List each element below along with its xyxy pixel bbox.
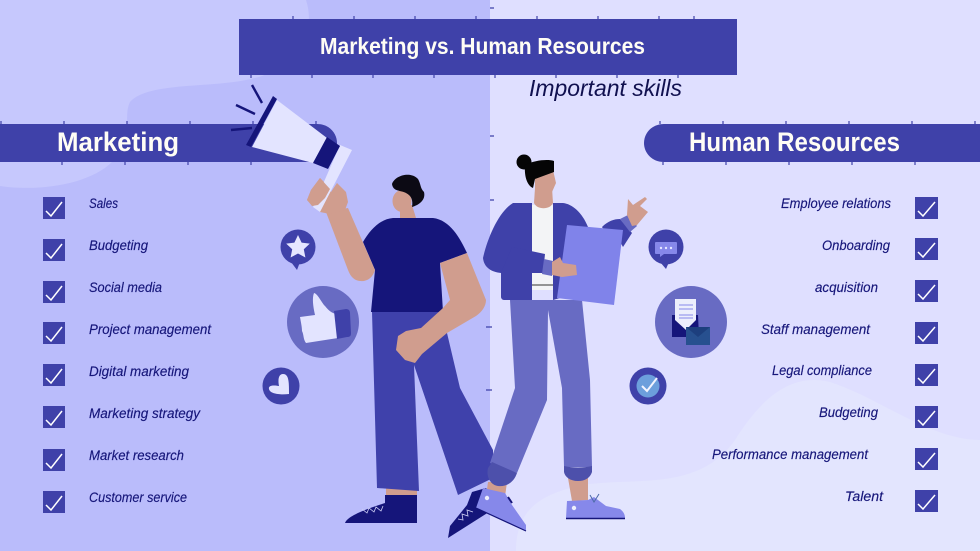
- human resources heading bar: [644, 121, 980, 165]
- skill: Sales: [43, 196, 118, 219]
- man's neck: [400, 205, 416, 218]
- skill: Budgeting: Budgeting: [89, 238, 148, 253]
- woman figure with folder: [476, 154, 648, 531]
- skill: Legal compliance: [772, 363, 938, 386]
- skill: Marketing strategy: [43, 406, 201, 428]
- subtitle: Important skills: [529, 75, 682, 101]
- human resources heading bar: Human Resources: [689, 127, 900, 157]
- human resources skills list: [712, 196, 938, 512]
- title banner: [239, 16, 737, 78]
- marketing skills list: [43, 196, 212, 513]
- icon: check mark: [630, 368, 666, 404]
- marketing heading bar: [0, 121, 337, 165]
- skill: Onboarding: Onboarding: [822, 238, 890, 253]
- megaphone rim: [246, 96, 277, 147]
- icon: heart: [262, 368, 300, 404]
- megaphone body: [252, 100, 327, 163]
- skill: acquisition: [815, 280, 938, 302]
- skill: Onboarding: [822, 238, 938, 260]
- woman's trouser cuffs: [487, 462, 592, 486]
- sound lines: [231, 85, 262, 130]
- title banner: Marketing vs. Human Resources: [320, 33, 645, 59]
- skill: Project management: [43, 322, 212, 344]
- icon: envelope with letter: [655, 286, 727, 358]
- megaphone handle: [313, 145, 352, 212]
- skill: Employee relations: Employee relations: [781, 196, 891, 211]
- man's trousers: [372, 312, 493, 495]
- man's shirt: [363, 218, 467, 312]
- skill: Digital marketing: [43, 364, 189, 386]
- skill: Market research: [43, 448, 184, 471]
- man's back shoe: [448, 488, 500, 538]
- man's fingers: [307, 178, 330, 206]
- woman's trousers: [490, 300, 592, 473]
- woman's cuff: [542, 259, 553, 276]
- skill: Social media: Social media: [89, 280, 162, 295]
- man figure with megaphone: [231, 85, 500, 538]
- skill: acquisition: acquisition: [815, 280, 878, 295]
- woman's far cuff: [620, 215, 637, 232]
- skill: Customer service: [43, 490, 187, 513]
- man's head: [392, 190, 412, 212]
- skill: Staff management: Staff management: [761, 322, 871, 337]
- man's hair: [392, 175, 424, 207]
- skill: Talent: Talent: [845, 489, 884, 504]
- icon: star bubble: [280, 230, 316, 270]
- woman's neck: [534, 188, 553, 208]
- woman's folder: [557, 225, 623, 305]
- man's raised arm: [326, 208, 375, 281]
- man's front shoe: [345, 495, 417, 523]
- skill: Performance management: [712, 447, 938, 470]
- icon: speech bubble: [648, 230, 684, 269]
- woman's right ankle: [568, 478, 588, 501]
- woman's far arm: [602, 219, 632, 247]
- skill: Budgeting: [819, 405, 938, 428]
- icon: thumbs up: [287, 286, 359, 358]
- marketing heading bar: Marketing: [57, 127, 179, 157]
- man's hand: [307, 178, 348, 214]
- man's ankle: [386, 488, 417, 496]
- woman's pointing hand: [627, 197, 648, 226]
- woman's jacket sleeve: [501, 247, 545, 273]
- skill: Sales: Sales: [89, 196, 118, 211]
- woman's jacket: [483, 203, 588, 300]
- skill: Marketing strategy: Marketing strategy: [89, 406, 201, 421]
- skill: Budgeting: Budgeting: [819, 405, 878, 420]
- skill: Digital marketing: Digital marketing: [89, 364, 189, 379]
- skill: Staff management: [761, 322, 938, 344]
- woman's hand: [552, 257, 577, 277]
- skill: Social media: [43, 280, 162, 303]
- skill: Market research: Market research: [89, 448, 184, 463]
- man's hand on hip arm: [396, 253, 486, 363]
- woman's left ankle: [486, 482, 507, 497]
- skill: Budgeting: [43, 238, 148, 261]
- skill: Customer service: Customer service: [89, 490, 187, 505]
- woman's right shoe: [566, 494, 625, 518]
- woman's left shoe: [476, 488, 526, 531]
- skill: Project management: Project management: [89, 322, 212, 337]
- skill: Employee relations: [781, 196, 938, 219]
- skill: Talent: [845, 489, 938, 512]
- skill: Performance management: Performance management: [712, 447, 869, 462]
- skill: Legal compliance: Legal compliance: [772, 363, 872, 378]
- woman's face: [535, 170, 556, 192]
- megaphone collar: [313, 137, 340, 169]
- woman's hair: [516, 154, 554, 188]
- woman's shirt: [532, 205, 553, 290]
